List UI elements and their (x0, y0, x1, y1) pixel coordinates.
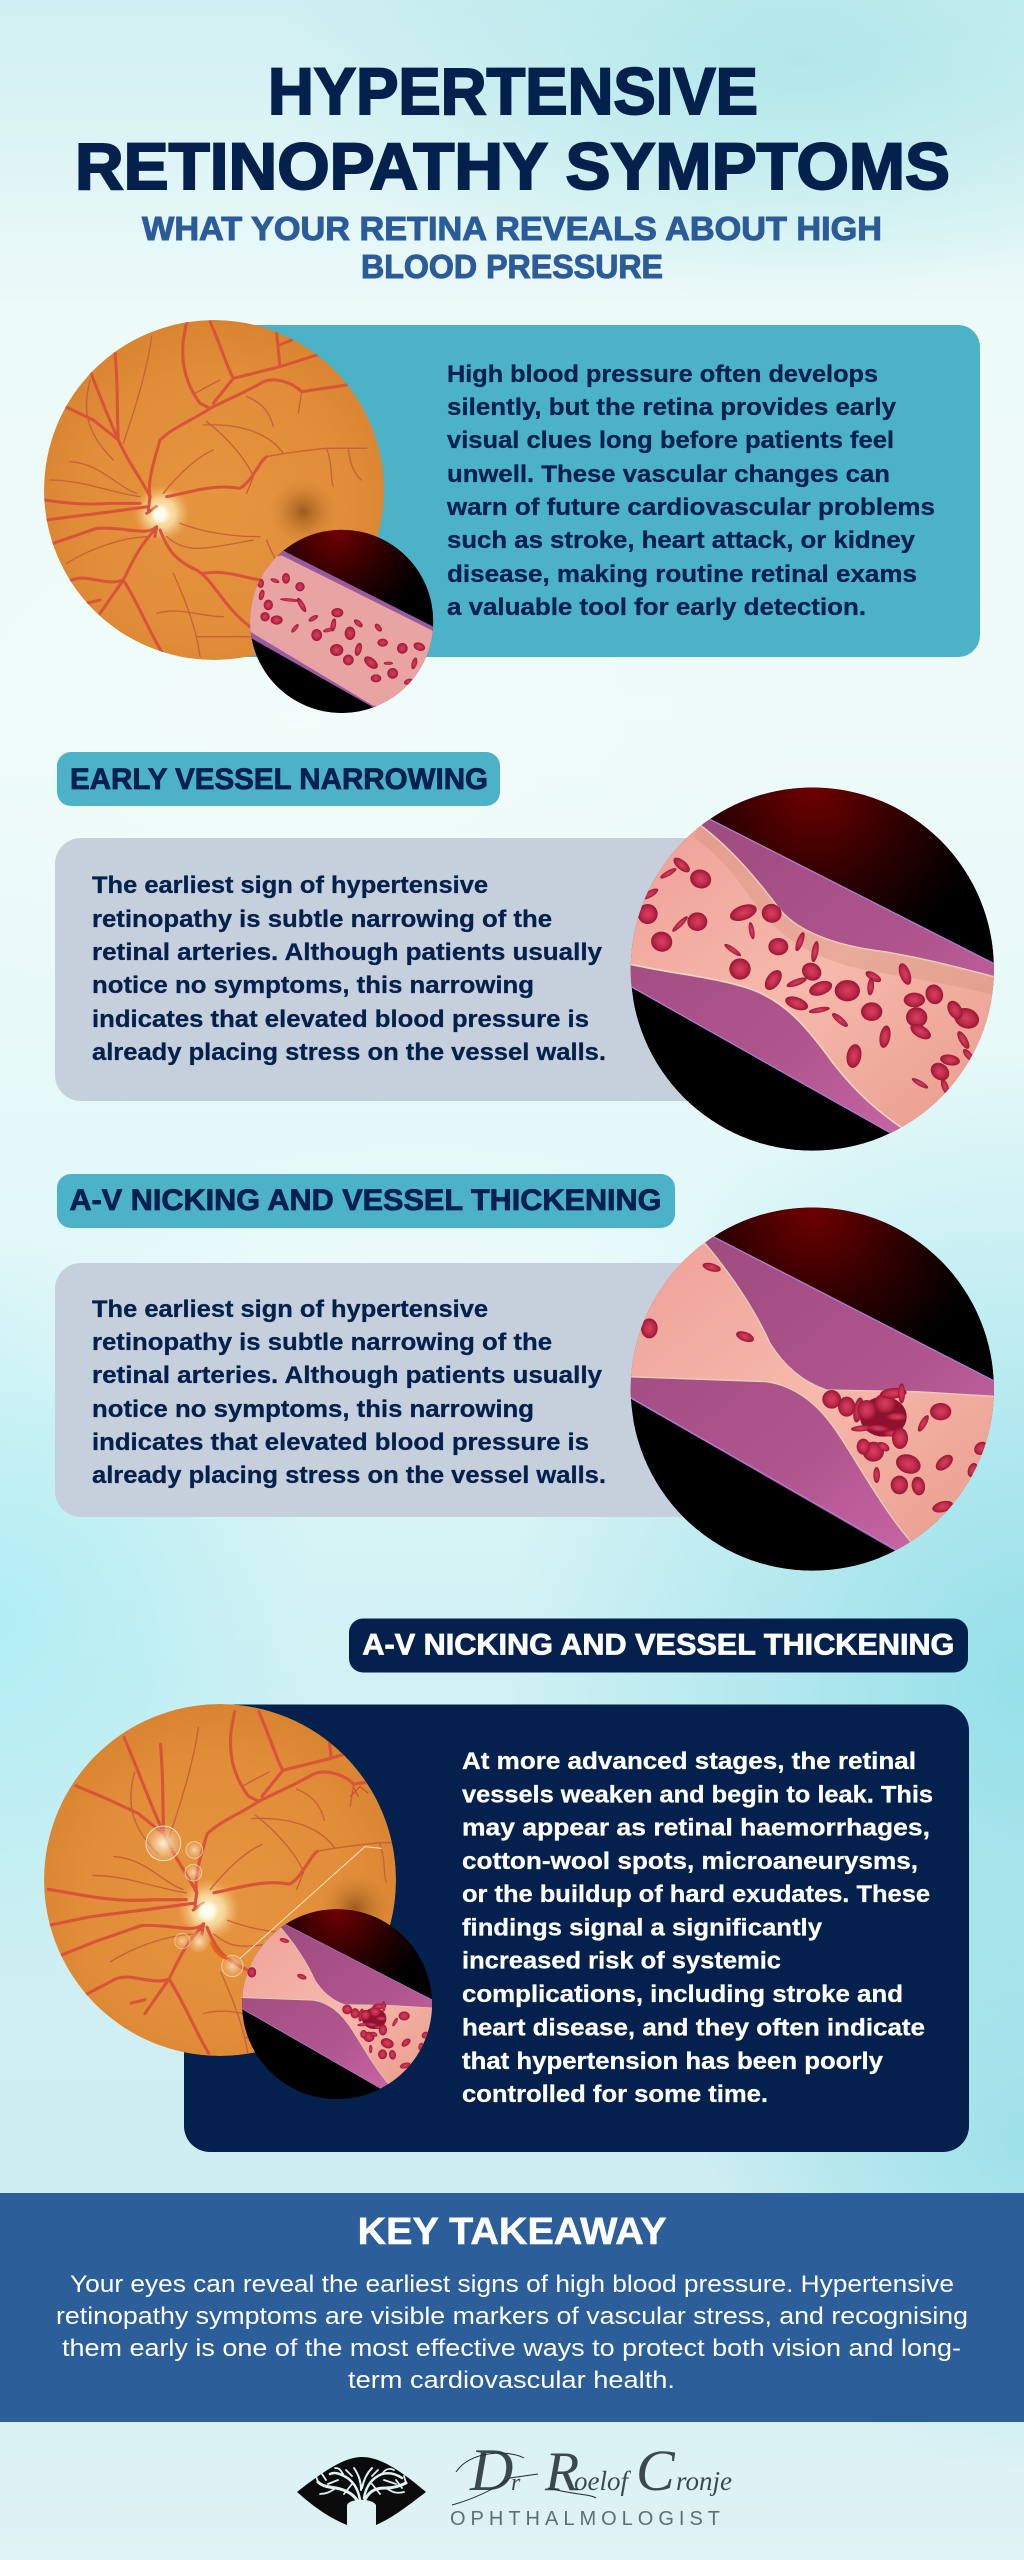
title: RETINOPATHY SYMPTOMS (75, 129, 950, 203)
text: key takeaway: Your eyes can reveal the earliest signs of high blood pressure. Hypertensive (70, 2271, 954, 2298)
heading chip: early vessel narrowing (57, 752, 500, 806)
signature: Dr Roelof Cronje: r (511, 2470, 521, 2496)
heading chip: A-V nicking (57, 1174, 675, 1228)
text: advanced changes (462, 1748, 933, 2108)
text: introduction: a valuable tool for early detection. (447, 594, 866, 621)
title: HYPERTENSIVE (268, 54, 758, 128)
image: nicked vessel (630, 1207, 994, 1571)
text: A-V nicking: retinopathy is subtle narrowing of the (92, 1329, 552, 1356)
image: healthy vessel cross-section (247, 530, 437, 713)
subtitle (142, 210, 882, 285)
text: advanced changes: cotton-wool spots, microaneurysms, (462, 1848, 918, 1875)
text: key takeaway (56, 2271, 968, 2394)
panel: early vessel narrowing (55, 838, 735, 1101)
text: early vessel narrowing: already placing stress on the vessel walls. (92, 1039, 606, 1066)
text: introduction: silently, but the retina provides early (447, 394, 897, 421)
text: A-V nicking: indicates that elevated blood pressure is (92, 1429, 589, 1456)
signature: Dr Roelof Cronje: C (636, 2438, 676, 2503)
text: advanced changes: may appear as retinal haemorrhages, (462, 1815, 930, 1842)
signature: Dr Roelof Cronje (452, 2437, 732, 2505)
signature: Dr Roelof Cronje: oelof (574, 2466, 631, 2496)
text: advanced changes: that hypertension has been poorly (462, 2048, 884, 2075)
signature: Dr Roelof Cronje: ronje (676, 2466, 732, 2496)
wordmark: ophthalmologist: OPHTHALMOLOGIST (450, 2508, 720, 2530)
signature: Dr Roelof Cronje: R (544, 2441, 579, 2503)
image: healthy retina fundus (7, 320, 384, 660)
text: introduction: warn of future cardiovascular problems (446, 494, 935, 521)
panel: introduction (200, 325, 980, 657)
text: early vessel narrowing: retinal arteries. Although patients usually (92, 939, 603, 966)
subtitle: BLOOD PRESSURE (361, 248, 663, 285)
text: A-V nicking: The earliest sign of hypertensive (92, 1296, 488, 1323)
text: A-V nicking: notice no symptoms, this narrowing (92, 1396, 534, 1423)
text: key takeaway: retinopathy symptoms are visible markers of vascular stress, and recognising (56, 2303, 968, 2330)
heading chip: A-V nicking: A-V NICKING AND VESSEL THICKENING (70, 1184, 662, 1217)
subtitle: WHAT YOUR RETINA REVEALS ABOUT HIGH (142, 210, 882, 247)
heading chip: advanced changes: A-V NICKING AND VESSEL THICKENING (362, 1629, 954, 1662)
text: introduction: disease, making routine retinal exams (447, 561, 917, 588)
logo (297, 2437, 732, 2530)
panel: advanced changes (184, 1704, 969, 2152)
text: advanced changes: vessels weaken and begin to leak. This (462, 1782, 933, 1808)
icon: eye with tree (297, 2457, 426, 2530)
text: advanced changes: heart disease, and they often indicate (462, 2015, 925, 2042)
text: introduction: unwell. These vascular changes can (447, 461, 890, 488)
text: A-V nicking: already placing stress on the vessel walls. (92, 1462, 606, 1489)
text: introduction: such as stroke, heart attack, or kidney (447, 527, 916, 554)
heading chip: advanced changes (349, 1618, 968, 1672)
text: key takeaway: term cardiovascular health. (348, 2367, 675, 2394)
text: early vessel narrowing: indicates that elevated blood pressure is (92, 1006, 589, 1033)
heading: key takeaway: KEY TAKEAWAY (358, 2211, 667, 2253)
text: A-V nicking: retinal arteries. Although patients usually (92, 1362, 603, 1389)
text: introduction: High blood pressure often develops (447, 361, 878, 388)
lesion markers (146, 1787, 382, 1977)
text: introduction: visual clues long before patients feel (447, 427, 894, 454)
panel: key takeaway (0, 2193, 1024, 2422)
text: advanced changes: controlled for some time. (462, 2081, 768, 2108)
text: early vessel narrowing (92, 872, 606, 1066)
text: introduction (446, 361, 935, 621)
text: early vessel narrowing: retinopathy is subtle narrowing of the (92, 906, 552, 933)
image: narrowed vessel (630, 787, 994, 1151)
image: damaged retina fundus (44, 1704, 421, 2058)
signature: Dr Roelof Cronje: D (469, 2437, 513, 2503)
text: advanced changes: complications, including stroke and (462, 1981, 903, 2008)
heading chip: early vessel narrowing: EARLY VESSEL NARROWING (70, 763, 488, 796)
text: advanced changes: findings signal a significantly (462, 1915, 823, 1942)
text: early vessel narrowing: notice no symptoms, this narrowing (92, 972, 534, 999)
text: early vessel narrowing: The earliest sign of hypertensive (92, 872, 488, 899)
text: A-V nicking (92, 1296, 606, 1489)
text: advanced changes: At more advanced stages, the retinal (462, 1748, 916, 1775)
text: advanced changes: or the buildup of hard exudates. These (462, 1881, 930, 1908)
text: advanced changes: increased risk of systemic (462, 1948, 781, 1975)
title (75, 54, 950, 203)
text: key takeaway: them early is one of the most effective ways to protect both vision and long- (62, 2335, 961, 2362)
panel: A-V nicking (55, 1263, 735, 1517)
image: nicked vessel inset (242, 1909, 432, 2099)
